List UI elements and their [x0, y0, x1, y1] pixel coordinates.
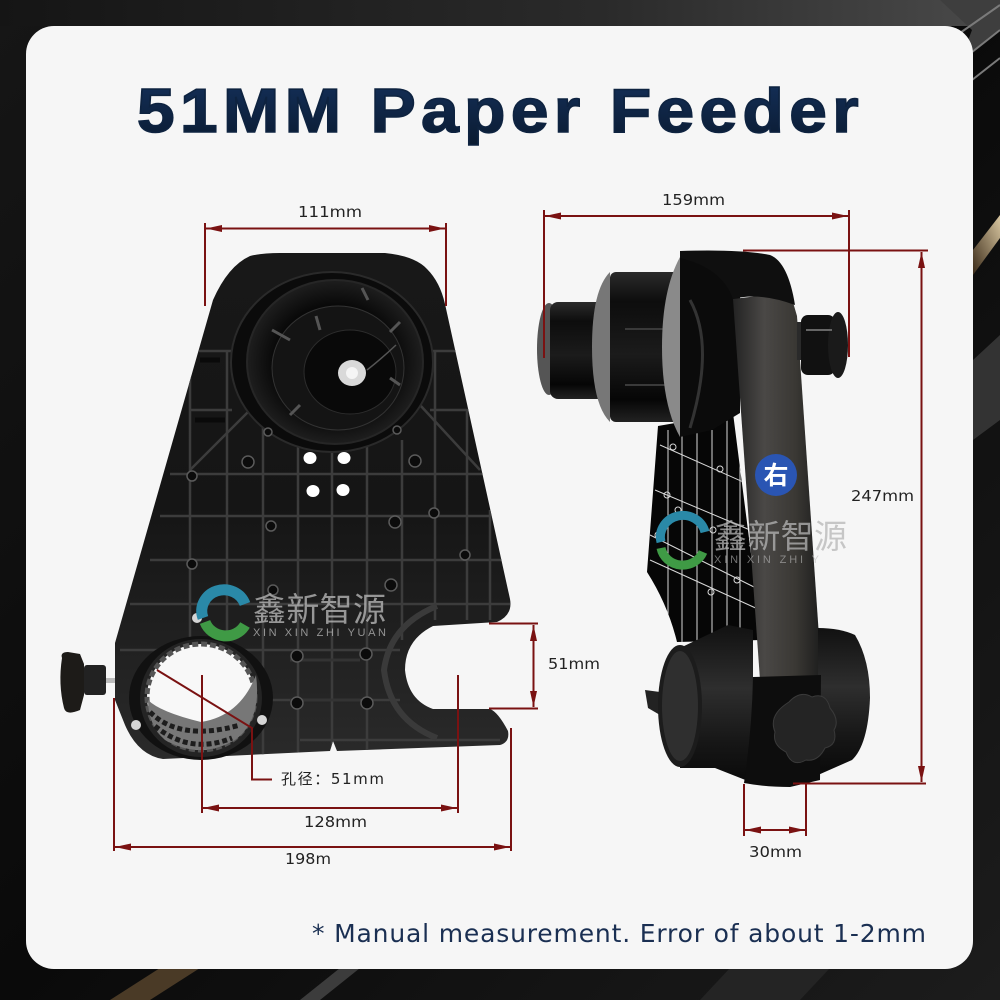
star knob: [773, 694, 836, 763]
four through holes: [304, 452, 350, 497]
product: feeder back view (left): [60, 253, 510, 760]
lower fin: [645, 690, 660, 715]
rear plate with white grid: [647, 413, 762, 650]
dimension: 198mm: 198m: [285, 850, 331, 868]
dimension: 198mm: [114, 698, 511, 868]
watermark: logo and brand text: [202, 590, 386, 639]
watermark: logo and brand text: XIN XIN ZHI YUAN: [253, 627, 386, 639]
dimension: 247mm: [743, 250, 928, 784]
mounting bolts: [187, 426, 470, 709]
small right knob: [797, 312, 848, 378]
watermark logo ring: [660, 515, 705, 565]
watermark: logo and brand text: 鑫新智源: [253, 591, 386, 628]
callout: hole diameter 51mm: [157, 670, 384, 788]
arm: [733, 292, 822, 680]
footnote: * Manual measurement. Error of about 1-2mm: [312, 919, 926, 948]
plate ribs grid: [120, 350, 510, 760]
product: feeder side view (right): [537, 250, 870, 787]
arm top cap: [680, 250, 795, 305]
dimension: 128mm: [202, 675, 458, 831]
dimension: 111mm: 111mm: [298, 203, 362, 221]
roller second step: [592, 272, 695, 422]
dimension: 111mm: [205, 203, 446, 306]
dimension: 128mm: 128mm: [304, 813, 367, 831]
lower clamp tube left: [658, 625, 753, 783]
title: 51MM Paper Feeder: [137, 77, 864, 146]
tube clamp: [129, 613, 273, 760]
dimension: 159mm: [544, 191, 849, 358]
roller end cap: [537, 303, 561, 395]
dimension: 51mm slot: 51mm: [548, 655, 600, 673]
roller hub: [231, 272, 433, 452]
lower clamp tube right: [818, 628, 870, 775]
callout: hole diameter 51mm: 孔径：51mm: [281, 770, 384, 788]
dimension: 247mm: 247mm: [851, 487, 914, 505]
blue side badge: [755, 454, 797, 496]
lower clamp block: [744, 675, 821, 787]
slot collar arc: [384, 606, 437, 738]
adjustment knob on left: [60, 652, 120, 713]
roller flange: [662, 255, 740, 437]
roller first step: [550, 302, 618, 399]
watermark: logo and brand text: 鑫新智源: [714, 518, 847, 555]
plate body: [115, 253, 510, 759]
blue side badge: 右: [763, 462, 789, 490]
watermark: logo and brand text: XIN XIN ZHI Y: [714, 554, 820, 566]
watermark: logo and brand text: [660, 515, 847, 566]
dimension: 30mm: [744, 784, 806, 861]
watermark logo ring: [202, 590, 245, 636]
dimension: 30mm: 30mm: [749, 843, 802, 861]
dimension: 51mm slot: [489, 624, 600, 708]
dimension: 159mm: 159mm: [662, 191, 725, 209]
